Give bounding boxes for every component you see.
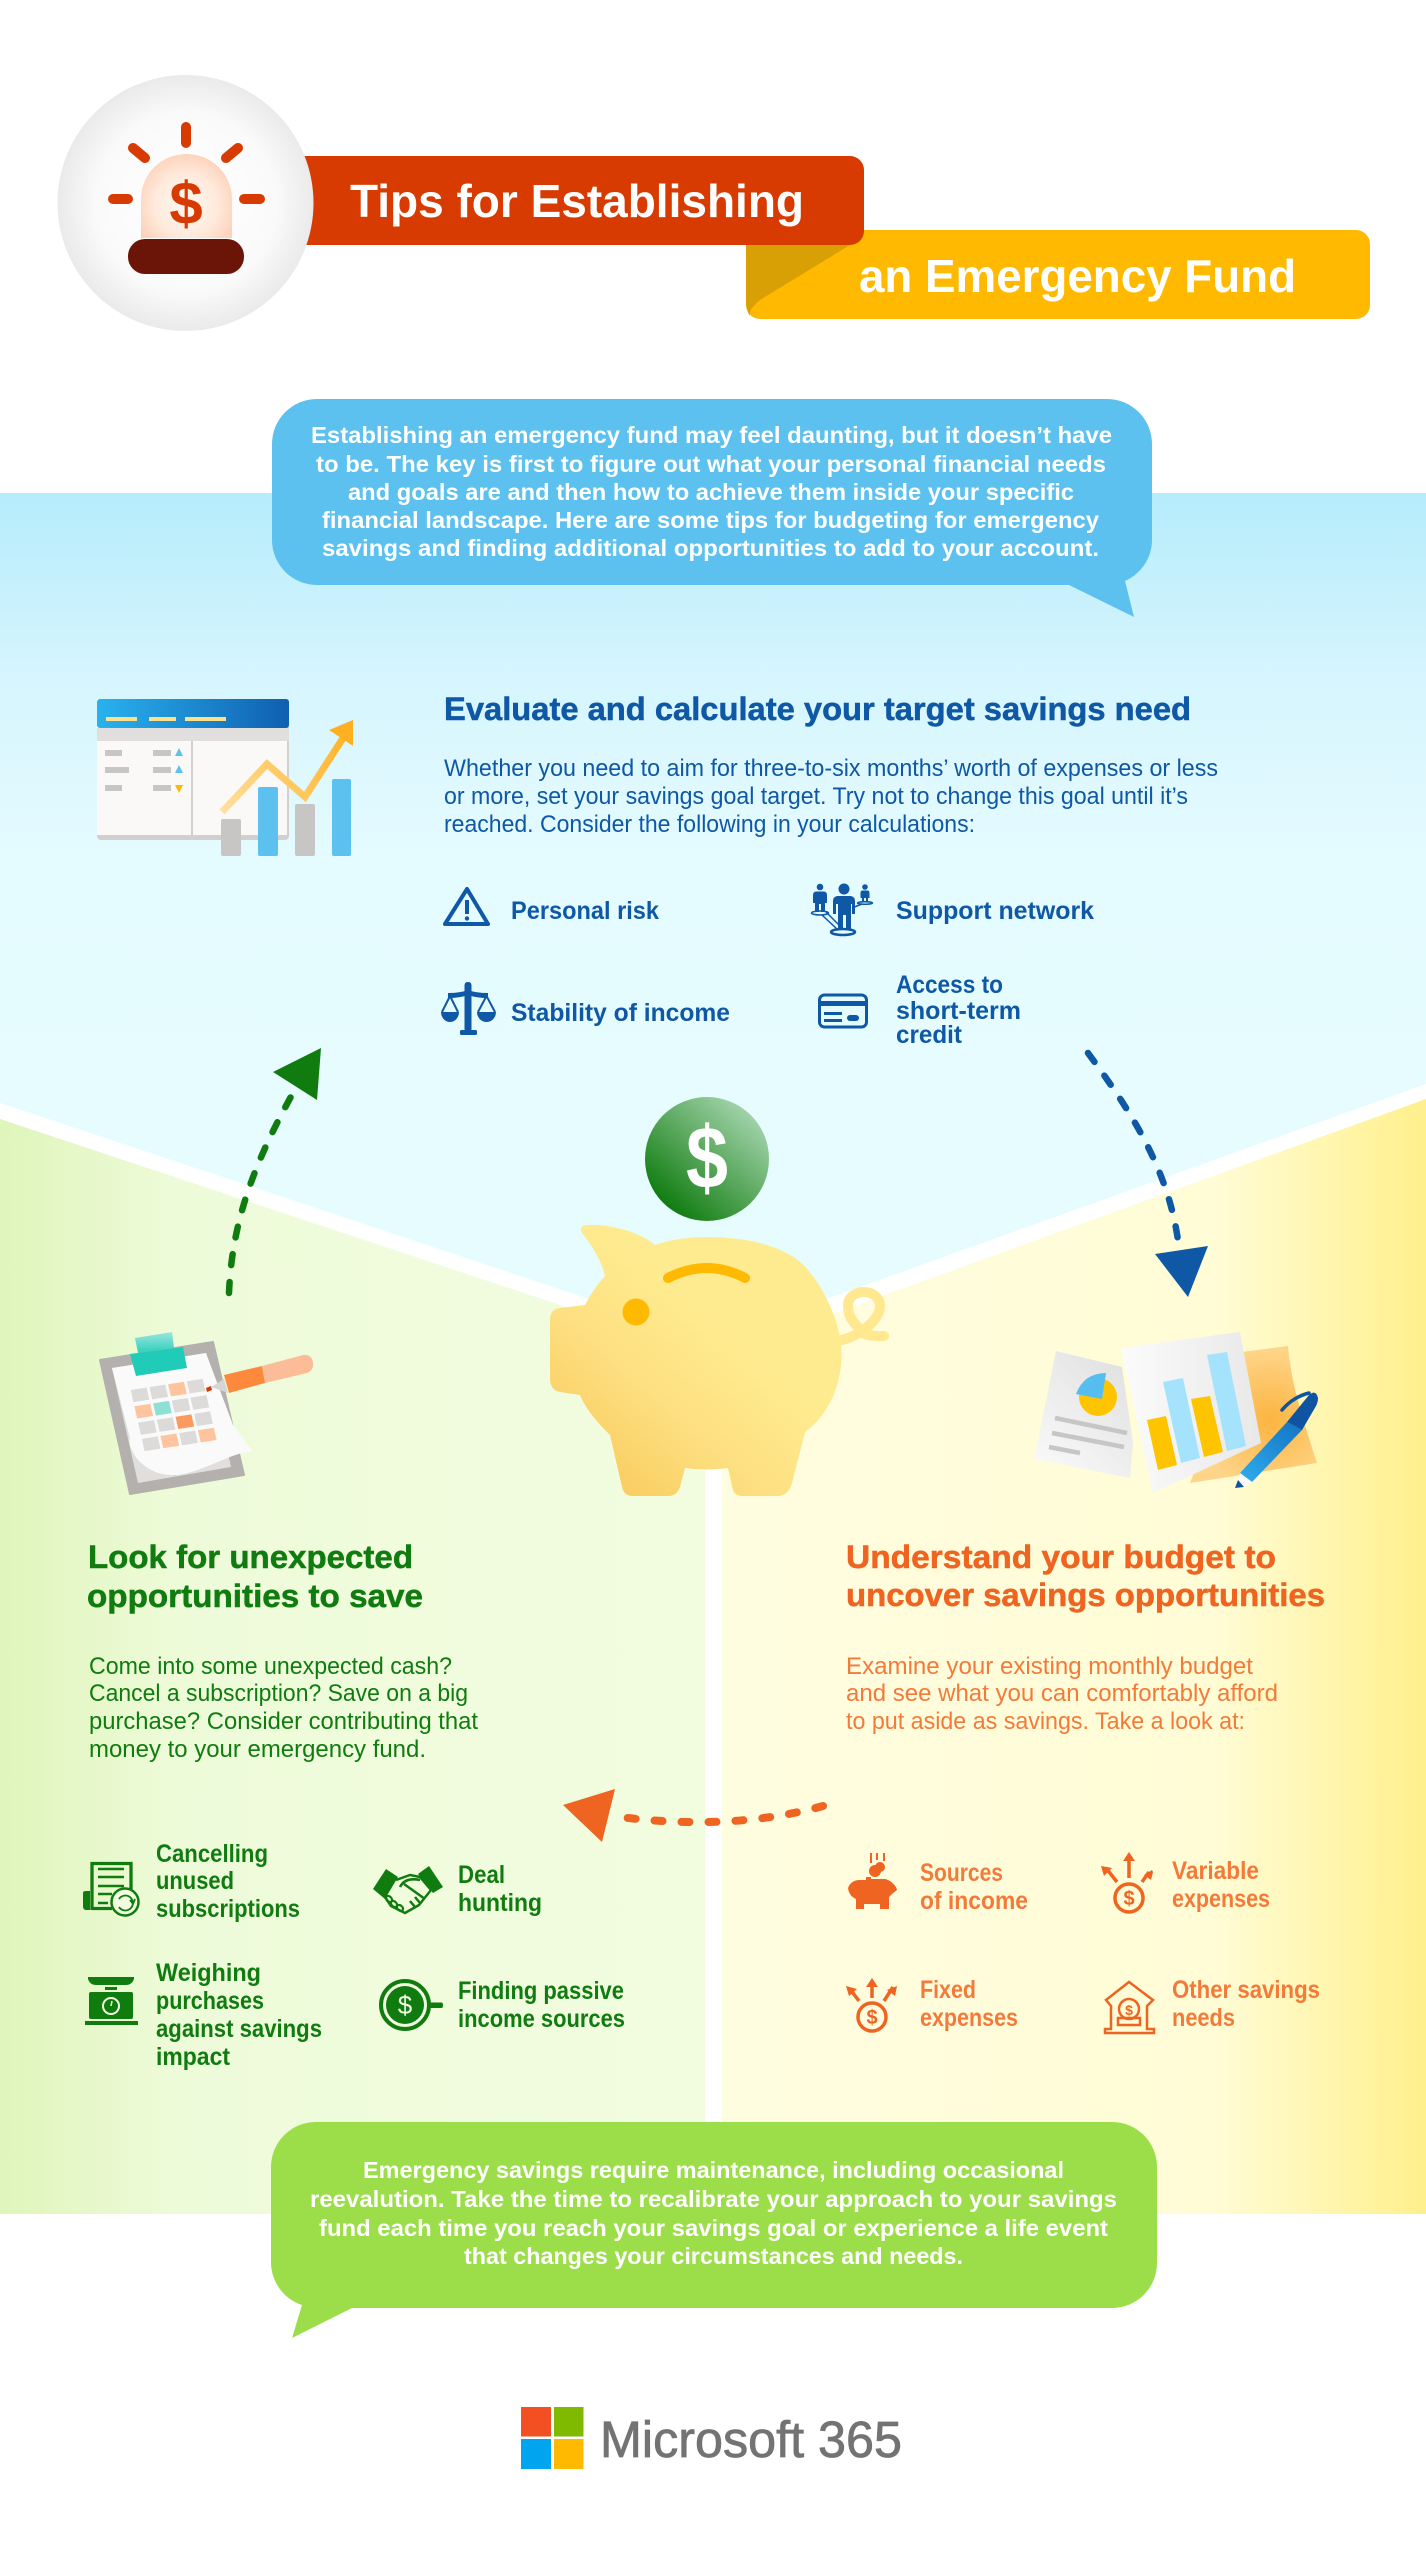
label: weighing purchases against savings impact: Weighing [156, 1959, 261, 1987]
label: fixed expenses: Fixed [920, 1976, 976, 2004]
label: finding passive income sources [458, 1977, 625, 2033]
icon: fixed expenses arrows and coin [846, 1978, 897, 2031]
text block: understand budget body: and see what you can comfortably afford [846, 1680, 1278, 1707]
label: variable expenses: Variable [1172, 1857, 1259, 1885]
label: cancelling unused subscriptions: subscriptions [156, 1895, 300, 1923]
callout: closing speech bubble: Emergency savings require maintenance, including occasional [363, 2157, 1064, 2183]
callout: intro speech bubble: savings and finding additional opportunities to add to your account. [322, 535, 1099, 561]
icon: support network [812, 884, 872, 935]
label: variable expenses: expenses [1172, 1885, 1270, 1913]
heading: understand your budget: uncover savings opportunities [846, 1577, 1325, 1613]
label: weighing purchases against savings impact: against savings [156, 2015, 322, 2043]
text block: understand budget body: Examine your existing monthly budget [846, 1653, 1253, 1680]
label: other savings needs: Other savings [1172, 1976, 1320, 2004]
icon: clipboard calendar [100, 1332, 313, 1494]
icon: savings house [1105, 1982, 1154, 2033]
icon: handshake [373, 1866, 443, 1913]
text block: look for opportunities body: purchase? Consider contributing that [89, 1708, 478, 1735]
banner: red upper ribbon [290, 156, 864, 245]
icon: fixed expenses arrows and coin: $ [866, 2007, 878, 2029]
logo: Microsoft 365: Microsoft 365 [600, 2411, 902, 2468]
text block: evaluate body: Whether you need to aim for three-to-six months’ worth of expenses or less [444, 755, 1218, 782]
icon: variable expenses arrows and coin: $ [1123, 1888, 1135, 1910]
icon: variable expenses arrows and coin [1101, 1852, 1153, 1912]
icon: dollar coin [645, 1097, 769, 1221]
callout: intro speech bubble: and goals are and then how to achieve them inside your specific [348, 479, 1074, 505]
icon: piggy bank with coins [848, 1853, 897, 1909]
icon: emergency siren with dollar sign: $ [169, 170, 203, 237]
label: weighing purchases against savings impact: purchases [156, 1987, 264, 2015]
icon: credit card [819, 995, 867, 1027]
label: access to short-term credit [896, 971, 1021, 1049]
label: deal hunting: hunting [458, 1889, 542, 1917]
text block: look for opportunities body: money to your emergency fund. [89, 1736, 426, 1763]
arrow: green dashed up [229, 1048, 321, 1293]
label: stability of income: Stability of income [511, 999, 730, 1027]
label: deal hunting [458, 1861, 542, 1917]
heading: understand your budget [846, 1539, 1325, 1613]
banner: ribbon fold [746, 245, 850, 316]
label: access to short-term credit: credit [896, 1021, 963, 1049]
label: deal hunting: Deal [458, 1861, 505, 1889]
text block: understand budget body [846, 1653, 1278, 1735]
label: weighing purchases against savings impact [156, 1959, 322, 2071]
label: cancelling unused subscriptions: Cancelling [156, 1840, 268, 1868]
icon: savings house: $ [1125, 2002, 1133, 2018]
banner: amber lower ribbon [746, 230, 1370, 319]
text block: evaluate body: reached. Consider the following in your calculations: [444, 811, 975, 838]
text block: look for opportunities body: Cancel a subscription? Save on a big [89, 1680, 468, 1707]
label: weighing purchases against savings impact: impact [156, 2043, 231, 2071]
label: cancelling unused subscriptions: unused [156, 1867, 234, 1895]
heading: evaluate: Evaluate and calculate your target savings need [444, 691, 1191, 727]
label: sources of income [920, 1859, 1028, 1915]
label: sources of income: Sources [920, 1859, 1003, 1887]
title banner [290, 156, 1370, 319]
callout: intro speech bubble [272, 399, 1152, 617]
icon: budget documents [1034, 1332, 1318, 1493]
icon: balance scale [441, 982, 496, 1035]
icon: piggy bank [550, 1225, 884, 1496]
label: access to short-term credit: Access to [896, 971, 1003, 999]
label: fixed expenses [920, 1976, 1018, 2032]
arrow: orange dashed left [563, 1789, 823, 1842]
callout: closing speech bubble: fund each time you reach your savings goal or experience a life event [319, 2215, 1108, 2241]
text block: look for opportunities body [89, 1653, 478, 1763]
icon: receipt with refresh [83, 1864, 138, 1916]
heading: look for unexpected opportunities [87, 1539, 423, 1614]
callout: intro speech bubble: to be. The key is first to figure out what your personal financial needs [316, 451, 1106, 477]
label: finding passive income sources: Finding passive [458, 1977, 624, 2005]
title line one: Tips for Establishing [350, 175, 804, 227]
label: variable expenses [1172, 1857, 1270, 1913]
icon: spreadsheet with chart [97, 699, 353, 856]
icon: emergency siren with dollar sign [58, 75, 314, 331]
callout: intro speech bubble: Establishing an emergency fund may feel daunting, but it doesn’t have [311, 422, 1112, 448]
label: support network: Support network [896, 897, 1094, 925]
heading: look for unexpected opportunities: Look for unexpected [88, 1539, 413, 1575]
label: finding passive income sources: income sources [458, 2005, 625, 2033]
callout: closing speech bubble: that changes your circumstances and needs. [464, 2243, 963, 2269]
icon: dollar coin with handle: $ [398, 1990, 413, 2020]
label: other savings needs [1172, 1976, 1320, 2032]
icon: kitchen scale [85, 1977, 138, 2025]
heading: understand your budget: Understand your budget to [846, 1539, 1276, 1575]
text block: understand budget body: to put aside as savings. Take a look at: [846, 1708, 1245, 1735]
arrow: blue dashed down [1088, 1053, 1208, 1297]
text block: evaluate body: or more, set your savings goal target. Try not to change this goal until it’s [444, 783, 1188, 810]
panel: yellow background [722, 1099, 1426, 2214]
icon: dollar coin with handle [381, 1981, 443, 2029]
label: access to short-term credit: short-term [896, 997, 1021, 1025]
callout: intro speech bubble: financial landscape. Here are some tips for budgeting for emergency [322, 507, 1099, 533]
text block: evaluate body [444, 755, 1218, 838]
title line two: an Emergency Fund [859, 250, 1296, 302]
heading: look for unexpected opportunities: opportunities to save [87, 1578, 423, 1614]
label: cancelling unused subscriptions [156, 1840, 300, 1923]
label: sources of income: of income [920, 1887, 1028, 1915]
callout: closing speech bubble: reevalution. Take the time to recalibrate your approach to your savings [310, 2186, 1117, 2212]
text block: look for opportunities body: Come into some unexpected cash? [89, 1653, 452, 1680]
callout: closing speech bubble [271, 2122, 1157, 2338]
panel: green background [0, 1119, 705, 2214]
label: other savings needs: needs [1172, 2004, 1235, 2032]
panel: blue background [0, 493, 1426, 1340]
icon: warning triangle [445, 889, 488, 924]
label: personal risk: Personal risk [511, 897, 659, 925]
label: fixed expenses: expenses [920, 2004, 1018, 2032]
icon: dollar coin: $ [686, 1108, 728, 1207]
